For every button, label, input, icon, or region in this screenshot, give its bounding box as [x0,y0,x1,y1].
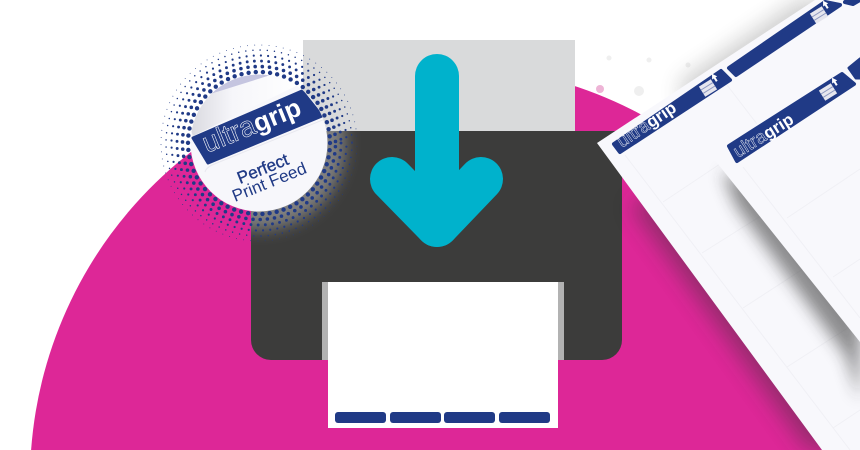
faint decorative dots [596,56,690,96]
printed sheet with label strips [328,282,558,428]
mini icon [697,72,723,97]
printer body [251,131,622,360]
ultragrip logo: ultragrip [198,91,305,159]
print feed text: Print Feed [229,159,309,206]
halftone dot ring [161,45,357,241]
paper entering printer [303,40,575,131]
label cell outlines [625,85,860,450]
lavender backing strip [210,74,270,95]
sheet shadows [625,0,822,450]
label sheet front [710,57,860,342]
output tray slot [322,282,564,360]
label cell outlines [743,167,860,318]
ultragrip logo small front: ultragrip [730,109,797,161]
blue label strip one [614,71,730,152]
badge: perfect print feed [191,74,328,212]
label outline [205,117,330,172]
label sheet back [597,0,860,450]
blue label strip two [729,2,840,75]
arrow pointing down [392,76,481,225]
badge glow on printer [251,131,354,238]
blue logo banner [193,91,322,163]
mini icon front [817,76,843,101]
front sheet shadow [722,172,860,400]
blue label strip front [729,74,854,161]
blue label strip front right [849,59,860,78]
ultragrip logo small: ultragrip [613,97,680,151]
white fold [192,76,270,136]
mini icon two [808,0,834,24]
blue label strip three [845,0,860,4]
perfect text: Perfect [234,150,292,188]
